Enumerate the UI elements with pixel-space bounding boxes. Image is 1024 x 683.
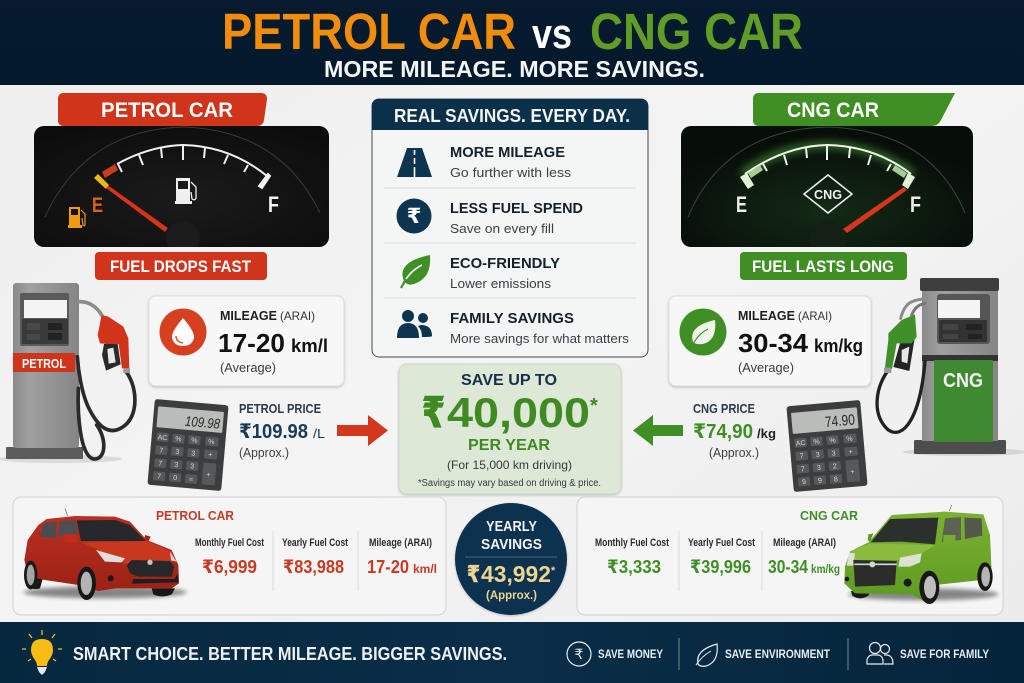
icon: cng calculator: % (829, 437, 836, 445)
icon: petrol calculator: AC (157, 434, 168, 442)
panel: save up to: * (590, 395, 598, 417)
monthly fuel cost: Monthly Fuel Cost (595, 537, 669, 549)
icon: petrol calculator: 3 (174, 462, 179, 469)
yearly fuel cost (282, 537, 348, 577)
petrol price: /L (313, 426, 325, 441)
icon: green car (844, 505, 998, 604)
icon: petrol calculator: 3 (191, 450, 196, 458)
icon: petrol calculator: 0 (173, 475, 177, 482)
cng price: ₹74,90 (693, 421, 753, 443)
card: petrol mileage: (ARAI) (280, 309, 315, 323)
icon: petrol calculator: % (175, 436, 182, 443)
yearly fuel cost (688, 537, 755, 577)
save environment: SAVE ENVIRONMENT (725, 647, 831, 661)
subtitle: MORE MILEAGE. MORE SAVINGS. (324, 56, 705, 82)
save money (567, 642, 663, 666)
card: cng mileage: MILEAGE (738, 308, 795, 323)
icon: petrol calculator: 109.98 (184, 413, 221, 432)
gauge dial: F (910, 192, 921, 217)
badge: yearly savings: ₹ (467, 561, 480, 587)
hose (77, 302, 135, 459)
panel: cng gauge (681, 93, 973, 280)
icon: petrol calculator: 7 (159, 448, 164, 455)
title: vs (532, 10, 572, 57)
icon: petrol calculator (147, 399, 229, 491)
badge: yearly savings: * (551, 565, 556, 577)
icon: cng calculator: % (813, 439, 820, 446)
cng price: CNG PRICE (693, 401, 755, 416)
save money: ₹ (575, 646, 584, 662)
card: cng mileage: 30-34 (738, 328, 809, 358)
panel: save up to: *Savings may vary based on driving & price. (418, 478, 601, 489)
badge: yearly savings: 43,992 (481, 561, 551, 587)
row: less fuel spend: Save on every fill (450, 221, 554, 236)
icon: cng calculator: 8 (834, 476, 838, 484)
heading: petrol car (58, 93, 267, 126)
icon: cng calculator: 7 (801, 466, 805, 473)
icon: cng calculator: 3 (816, 452, 820, 459)
panel header: REAL SAVINGS. EVERY DAY. (394, 106, 630, 126)
icon: petrol calculator: 7 (158, 460, 163, 468)
icon: petrol calculator: + (206, 472, 211, 479)
icon: cng calculator: AC (796, 440, 806, 448)
icon: low fuel pump (68, 207, 85, 228)
panel: save up to (399, 364, 621, 494)
panel: save up to: ₹ (422, 389, 445, 436)
card: petrol mileage: km/l (291, 336, 328, 356)
icon: family (397, 310, 432, 338)
card: petrol mileage: 17-20 (218, 328, 285, 358)
row: less fuel spend: LESS FUEL SPEND (450, 200, 583, 217)
icon: petrol calculator: % (191, 437, 198, 445)
icon: rupee (396, 198, 432, 234)
panel: save up to: 40,000 (447, 389, 590, 436)
yearly fuel cost: Yearly Fuel Cost (688, 537, 755, 549)
icon: leaf (401, 255, 430, 288)
icon: drop (160, 308, 206, 356)
badge: yearly savings (455, 503, 567, 615)
icon: cng calculator: 3 (831, 450, 836, 458)
icon: cng diamond: CNG (814, 187, 842, 202)
card: cng mileage: (Average) (738, 361, 794, 375)
icon: road (397, 148, 432, 177)
icon: petrol calculator: + (208, 452, 213, 459)
icon: light bulb (22, 630, 62, 675)
panel: real savings (372, 99, 648, 357)
yearly fuel cost: ₹83,988 (283, 556, 344, 577)
heading: petrol car: PETROL CAR (101, 99, 233, 122)
icon: petrol calculator: 7 (157, 473, 161, 481)
card: cng mileage: km/kg (814, 336, 863, 356)
icon: cng calculator: 74.90 (824, 412, 856, 431)
petrol price: PETROL PRICE (239, 401, 321, 416)
row: more mileage: Go further with less (450, 165, 572, 180)
title: CNG CAR (590, 3, 803, 60)
icon: petrol calculator: % (208, 439, 215, 446)
card: petrol mileage (149, 296, 344, 386)
heading: cng car: CNG CAR (787, 99, 879, 122)
petrol price (239, 401, 325, 460)
icon: cng calculator (786, 400, 868, 492)
panel: save up to: PER YEAR (468, 437, 550, 454)
gauge dial: F (268, 192, 279, 217)
gauge dial (34, 126, 329, 255)
gauge dial: E (736, 192, 747, 217)
petrol price: ₹109.98 (239, 421, 308, 443)
yearly fuel cost: Yearly Fuel Cost (282, 537, 348, 549)
mileage: Mileage (ARAI) (369, 537, 432, 549)
cng price (693, 401, 776, 460)
header band (0, 0, 1024, 85)
monthly fuel cost (595, 537, 669, 577)
icon: leaf (680, 308, 726, 356)
panel header (372, 99, 648, 130)
panel: save up to: SAVE UP TO (461, 372, 557, 389)
panel: cng car costs (577, 497, 1003, 615)
badge: yearly savings: YEARLY (486, 518, 537, 535)
icon: rupee: ₹ (407, 205, 421, 228)
icon: cng calculator: + (850, 469, 855, 476)
icon: petrol calculator: 3 (175, 449, 180, 456)
cng price: (Approx.) (709, 446, 759, 460)
panel: petrol gauge (34, 93, 329, 280)
mileage: 17-20 (367, 556, 409, 577)
icon: cng pump: CNG (943, 370, 983, 392)
row: family savings: More savings for what matters (450, 331, 630, 346)
icon: petrol calculator: = (189, 476, 193, 484)
arrow: cng to savings (633, 415, 683, 446)
save environment (696, 644, 831, 666)
caption: fuel lasts long (740, 252, 907, 280)
icon: white fuel pump (175, 178, 196, 204)
caption: fuel drops fast (95, 252, 267, 280)
row: family savings (397, 310, 630, 346)
row: eco-friendly: ECO-FRIENDLY (450, 255, 560, 272)
mileage: km/l (413, 562, 437, 576)
row: more mileage (397, 144, 572, 180)
monthly fuel cost (195, 537, 264, 577)
gauge dial: E (92, 194, 103, 217)
panel: petrol car costs (13, 497, 446, 615)
title: PETROL CAR (222, 3, 516, 60)
icon: cng calculator: 9 (818, 478, 822, 485)
icon: cng pump (877, 278, 1024, 456)
badge: yearly savings: SAVINGS (481, 536, 542, 553)
footer band (0, 622, 1024, 683)
save for family (867, 642, 989, 664)
card: petrol mileage: MILEAGE (220, 308, 277, 323)
monthly fuel cost: Monthly Fuel Cost (195, 537, 264, 549)
gauge dial (681, 126, 973, 256)
row: more mileage: MORE MILEAGE (450, 144, 565, 161)
row: eco-friendly (401, 255, 560, 291)
icon: red car (23, 508, 187, 600)
icon: cng calculator: 2 (833, 463, 837, 471)
yearly fuel cost: ₹39,996 (690, 556, 751, 577)
row: family savings: FAMILY SAVINGS (450, 310, 574, 327)
mileage: km/kg (811, 562, 840, 576)
card: cng mileage (669, 296, 871, 386)
icon: cng calculator: 7 (800, 453, 804, 460)
row: less fuel spend (396, 198, 583, 236)
hose (877, 299, 925, 432)
monthly fuel cost: ₹6,999 (202, 556, 257, 577)
card: petrol mileage: (Average) (220, 361, 276, 375)
title (222, 3, 803, 60)
cng price: /kg (757, 426, 776, 441)
nozzle (98, 315, 130, 373)
card: cng mileage: (ARAI) (798, 309, 832, 323)
badge: yearly savings: (Approx.) (486, 588, 537, 602)
icon: cng calculator: % (846, 436, 853, 443)
icon: cng calculator: + (848, 449, 853, 456)
save for family: SAVE FOR FAMILY (900, 647, 989, 661)
icon: cng calculator: 3 (817, 465, 821, 472)
mileage (768, 537, 840, 577)
footer band: SMART CHOICE. BETTER MILEAGE. BIGGER SAVINGS. (73, 643, 507, 664)
panel: save up to: (For 15,000 km driving) (447, 458, 572, 472)
icon: cng calculator: 9 (802, 479, 806, 486)
petrol price: (Approx.) (239, 446, 289, 460)
save money: SAVE MONEY (598, 647, 663, 661)
icon: petrol pump: PETROL (22, 356, 66, 371)
mileage: Mileage (ARAI) (773, 537, 836, 549)
heading: cng car (753, 93, 955, 126)
icon: petrol pump (0, 283, 135, 463)
monthly fuel cost: ₹3,333 (607, 556, 661, 577)
caption: fuel drops fast: FUEL DROPS FAST (110, 258, 251, 276)
panel: cng car costs: CNG CAR (800, 508, 859, 523)
icon: cng diamond (804, 175, 852, 213)
row: eco-friendly: Lower emissions (450, 276, 552, 291)
icon: petrol calculator: 3 (190, 463, 194, 471)
panel: petrol car costs: PETROL CAR (156, 508, 235, 523)
nozzle (884, 314, 917, 373)
caption: fuel lasts long: FUEL LASTS LONG (752, 258, 894, 276)
arrow: petrol to savings (337, 415, 388, 446)
mileage: 30-34 (768, 556, 809, 577)
mileage (367, 537, 437, 577)
